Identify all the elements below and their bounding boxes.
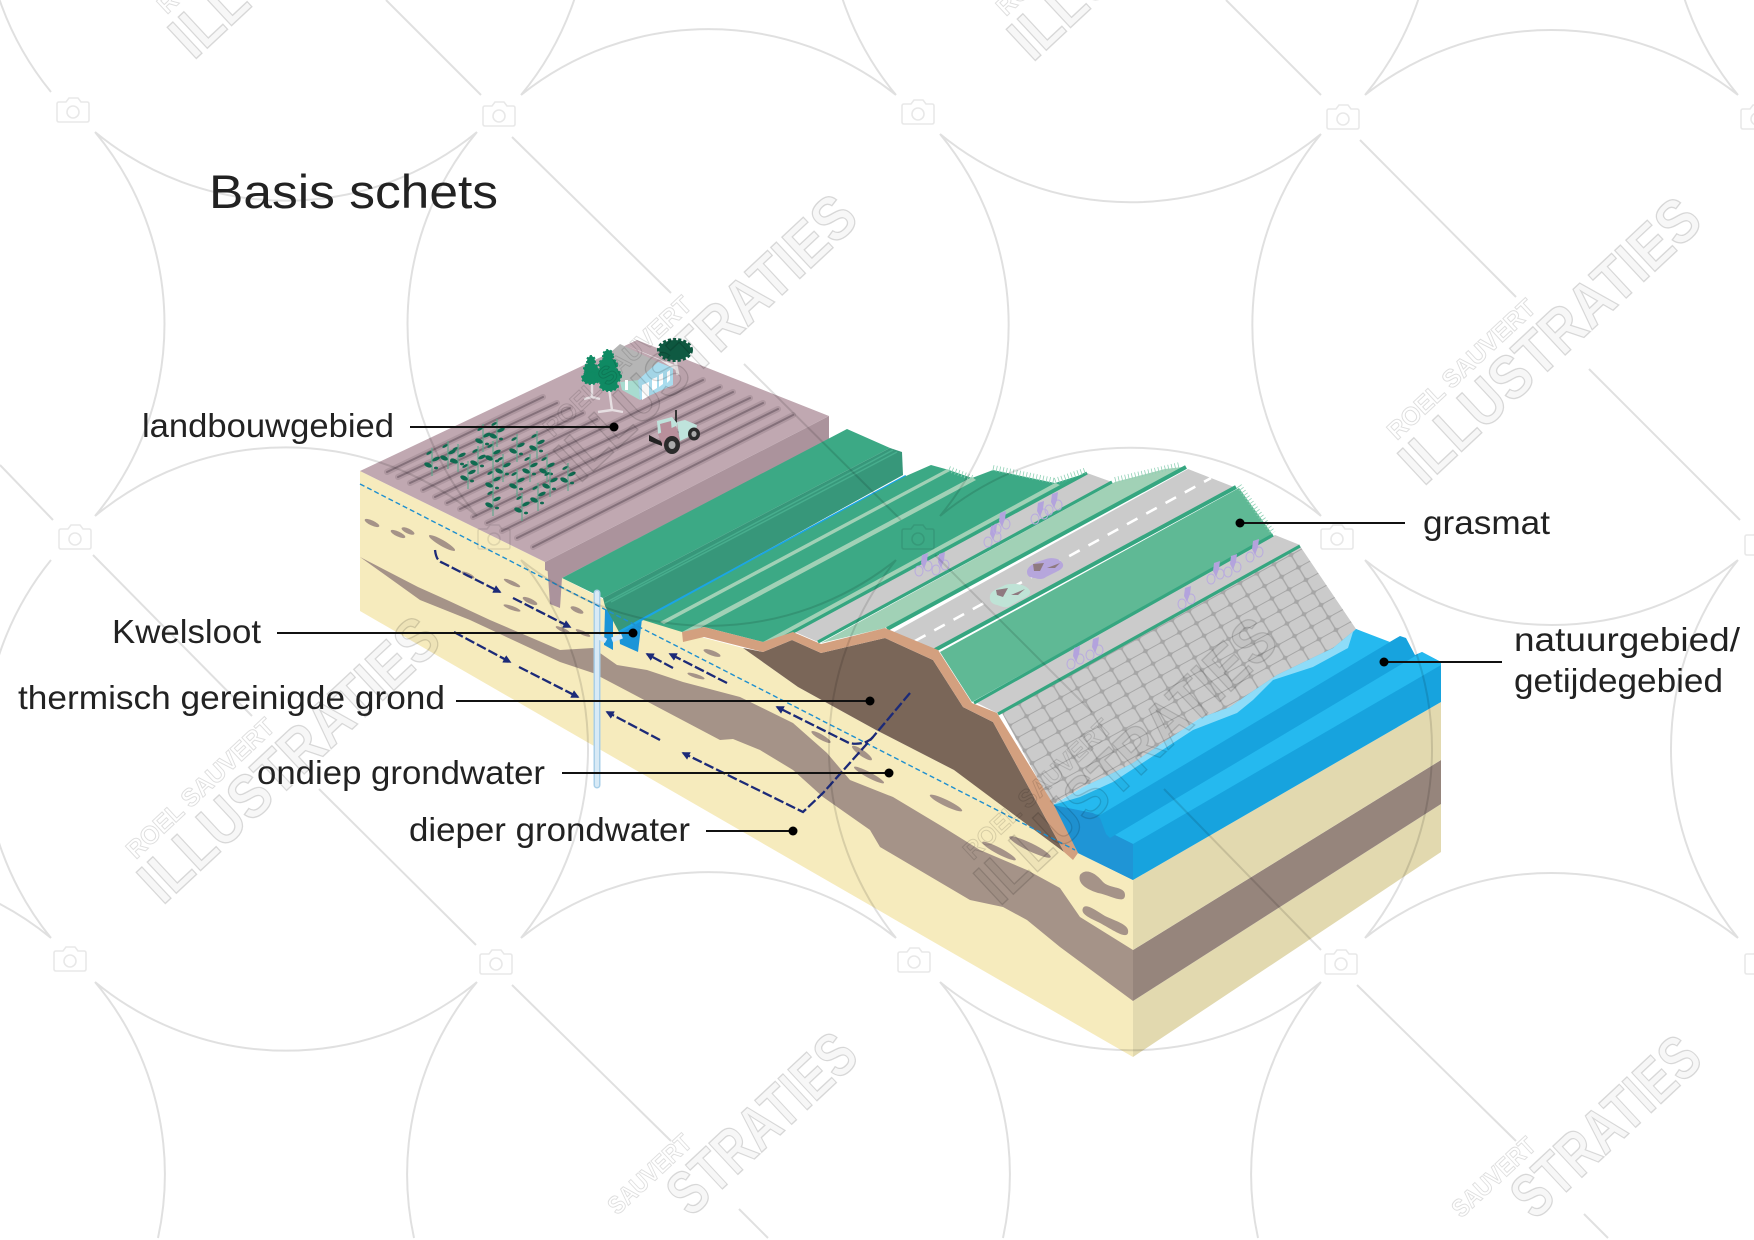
left face: clay layer [360, 557, 1133, 1001]
pale grass slope [821, 467, 1183, 643]
label: Kwelsloot: Kwelsloot [112, 613, 261, 650]
clay crust of dike [682, 627, 1078, 860]
label: Kwelsloot [112, 613, 638, 650]
icon: lilac car [1027, 558, 1063, 579]
watermark text: ILLUSTRATIES [542, 181, 871, 494]
label: grasmat [1236, 504, 1550, 541]
watermark text: ILLUSTRATIES [962, 604, 1291, 917]
left face: sand cross-section [360, 471, 1133, 1057]
label: landbouwgebied [142, 407, 618, 444]
agricultural notch [547, 562, 562, 608]
agricultural top surface [360, 340, 829, 562]
label: natuurgebied / getijdegebied: natuurgebied/ [1514, 621, 1741, 658]
sea: tidal flat light band [1053, 629, 1390, 815]
icon: cyclists [915, 492, 1263, 669]
asphalt road [894, 469, 1234, 650]
agricultural side slope [545, 416, 829, 578]
watermark text: ILLUSTRATIES [125, 603, 454, 916]
right face: clay layer [1133, 760, 1441, 1001]
light strips [660, 469, 950, 624]
water line [619, 476, 906, 632]
phreatic line [360, 484, 1075, 850]
icon: mint car [990, 584, 1030, 607]
grey cycle road [795, 473, 1112, 642]
grass fringe [949, 465, 1273, 533]
lower cycle road [977, 535, 1300, 713]
grass field: lower surface [643, 465, 1087, 642]
right face: lower sand layer [1133, 804, 1441, 1057]
label: ondiep grondwater [257, 754, 894, 791]
label: dieper grondwater [409, 811, 798, 848]
watermark text: ROEL SAUVERT [1382, 294, 1541, 445]
label: thermisch gereinigde grond: thermisch gereinigde grond [18, 679, 445, 716]
sea: front slope [1053, 805, 1133, 880]
label: natuurgebied / getijdegebied: getijdegebied [1514, 662, 1723, 699]
label: dieper grondwater: dieper grondwater [409, 811, 690, 848]
watermark text: ROEL SAUVERT [538, 291, 697, 442]
groundwater flow arrows [435, 550, 910, 812]
grass field: dark lower strip [603, 448, 903, 632]
watermark text: SAUVERT [602, 1129, 697, 1220]
title: Basis schets [209, 165, 498, 218]
label: landbouwgebied: landbouwgebied [142, 407, 394, 444]
dike paving [1002, 546, 1356, 805]
sea: base surface [1053, 629, 1441, 880]
icon: tractor [649, 410, 700, 454]
seepage pipe [597, 593, 622, 785]
watermark text: ROEL SAUVERT [958, 714, 1117, 865]
label: thermisch gereinigde grond [18, 679, 874, 716]
icon: farmhouse [611, 344, 677, 400]
crop plants [423, 419, 576, 521]
label: grasmat: grasmat [1423, 504, 1550, 541]
label: ondiep grondwater: ondiep grondwater [257, 754, 545, 791]
watermark text: STRATIES [653, 1019, 871, 1229]
watermark text: SAUVERT [1446, 1132, 1541, 1223]
clay and peat lenses [364, 517, 1128, 935]
road centre line [915, 478, 1211, 641]
watermark text: ILLUSTRATIES [1386, 184, 1715, 497]
icon: trees [582, 340, 691, 412]
grass field: upper strip [562, 429, 890, 598]
right face: upper sand layer [1133, 702, 1441, 950]
watermark text: ROEL SAUVERT [121, 713, 280, 864]
foam edge [1053, 629, 1356, 805]
ditch [604, 608, 613, 650]
watermark cameras [54, 98, 1754, 974]
isometric block diagram [360, 340, 1441, 1057]
label: natuurgebied / getijdegebied [1380, 621, 1741, 699]
furrows [387, 380, 793, 547]
sea: gully light band [1115, 652, 1441, 844]
thermally cleaned soil core [743, 638, 1064, 852]
grass slope: grasmat [940, 488, 1273, 702]
